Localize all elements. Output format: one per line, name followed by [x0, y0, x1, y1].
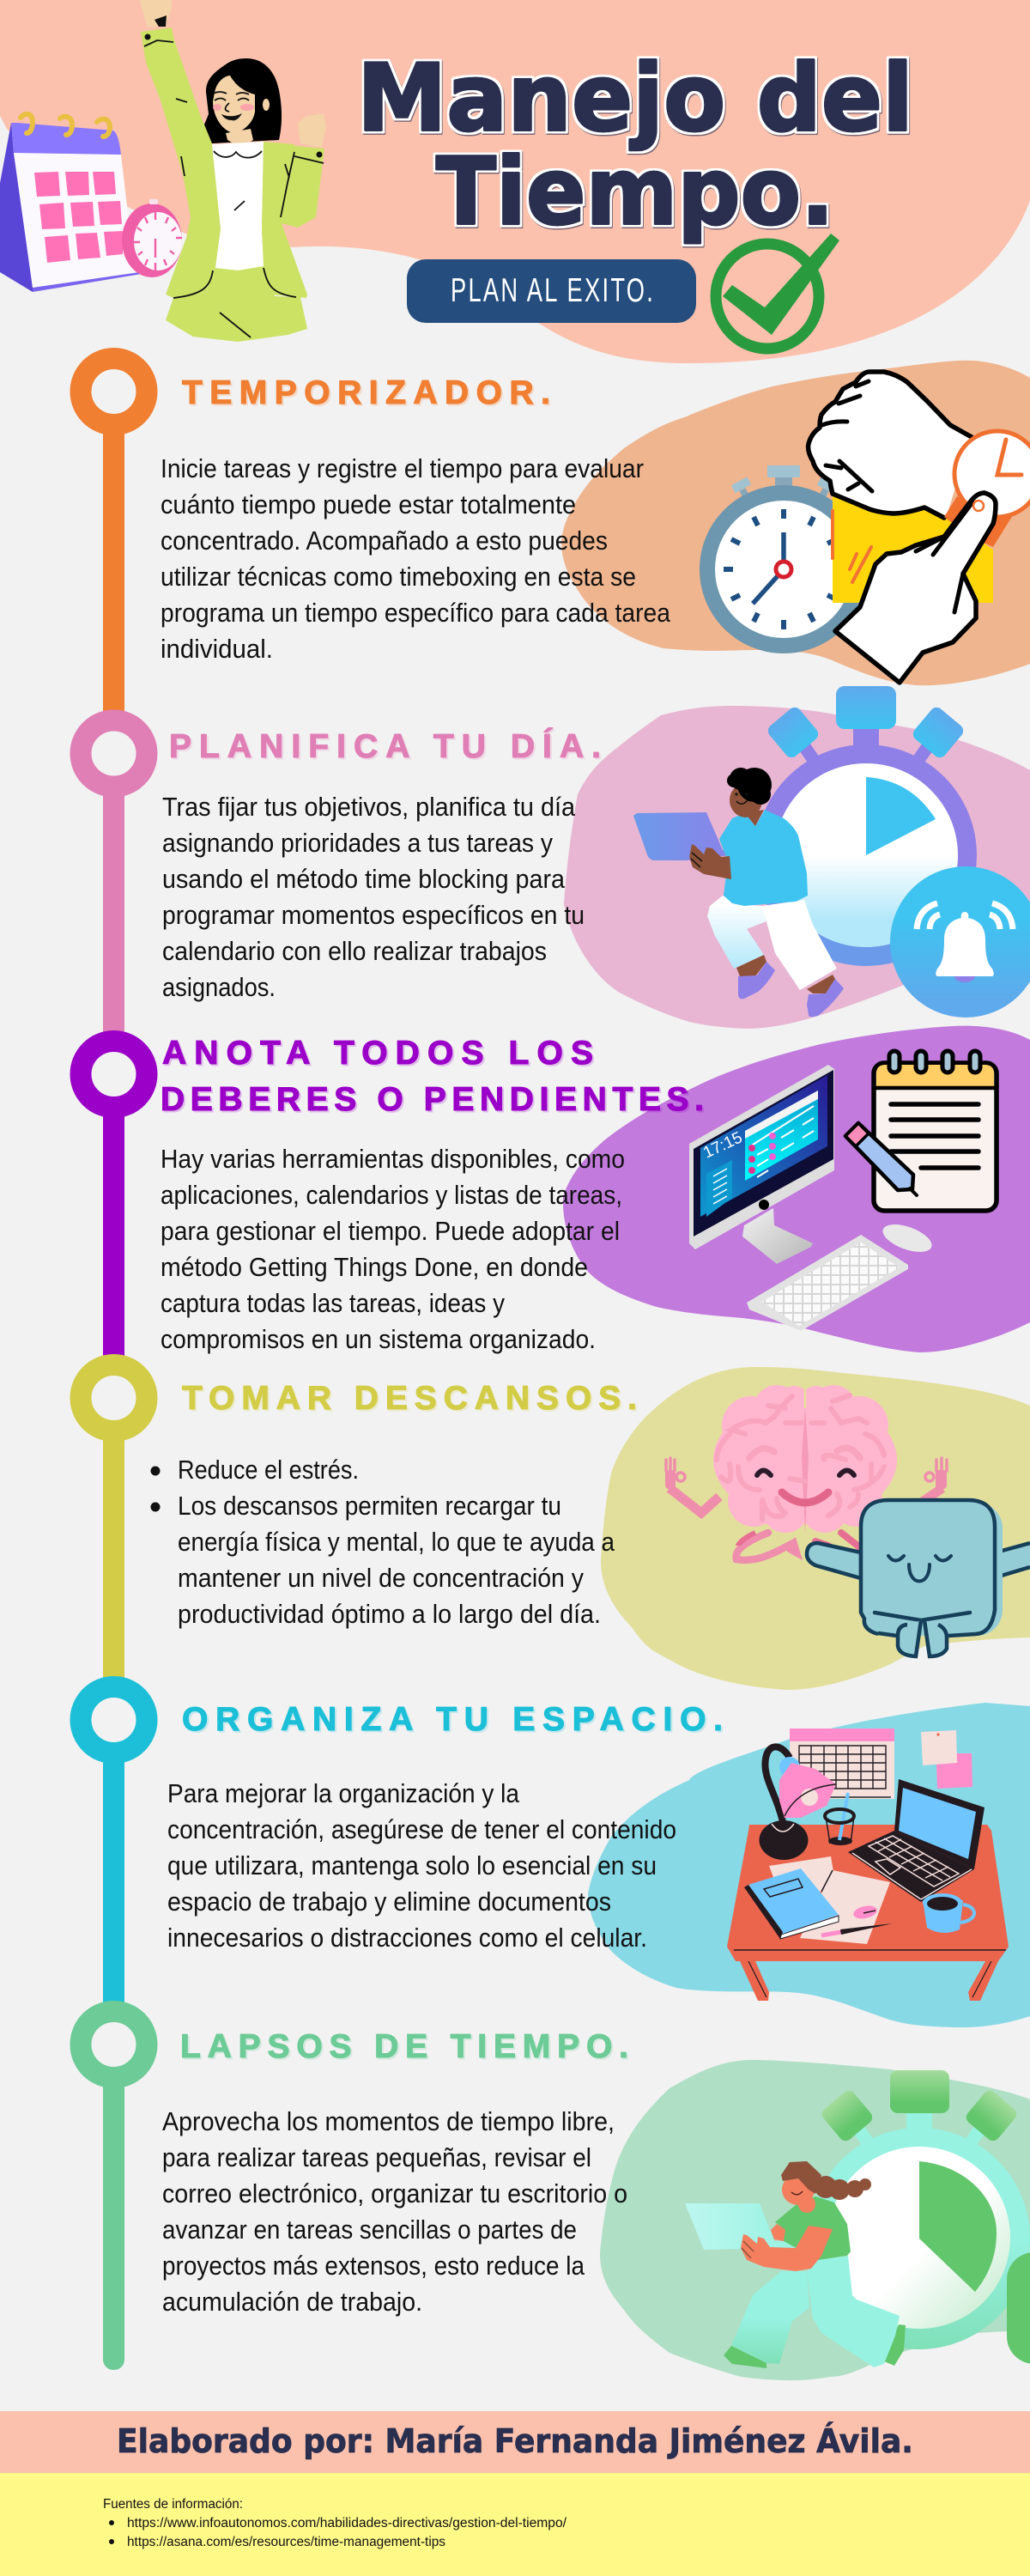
laptop	[894, 1779, 985, 1869]
stopwatch	[767, 465, 800, 477]
section 1 text: Inicie tareas y registre el tiempo para evaluar	[161, 453, 644, 483]
section 1 text: cuánto tiempo puede estar totalmente	[161, 489, 576, 519]
right arm	[282, 146, 324, 228]
head	[745, 810, 764, 826]
illustration: desk workspace	[727, 1728, 1009, 2001]
keyboard	[747, 1235, 908, 1331]
section 2 text: calendario con ello realizar trabajos	[162, 936, 547, 966]
section 1 text	[161, 453, 671, 664]
section 1 blob	[561, 361, 1030, 685]
section 4 bullet list: Reduce el estrés.	[178, 1455, 359, 1485]
section 6 text: correo electrónico, organizar tu escritorio o	[162, 2178, 627, 2208]
section 5 heading: ORGANIZA TU ESPACIO.	[182, 1701, 723, 1738]
illustration: meditating brain	[665, 1385, 947, 1560]
section 5 text	[167, 1778, 676, 1953]
right fist	[298, 113, 326, 148]
section 3 text	[161, 1144, 625, 1354]
desk legs	[740, 1961, 769, 2001]
section 5 text: espacio de trabajo y elimine documentos	[167, 1886, 611, 1917]
section 3 blob	[563, 1026, 1030, 1352]
section 1 text: programa un tiempo específico para cada tarea	[161, 598, 671, 628]
section 2 text: Tras fijar tus objetivos, planifica tu día	[162, 792, 576, 822]
section 2 text: asignados.	[162, 972, 276, 1002]
section 4 heading: TOMAR DESCANSOS.	[182, 1380, 637, 1417]
face	[213, 76, 255, 133]
section 5 text: Para mejorar la organización y la	[167, 1778, 520, 1808]
section 6 text: para realizar tareas pequeñas, revisar el	[162, 2142, 591, 2172]
pen	[821, 1932, 841, 1935]
section 6 heading: LAPSOS DE TIEMPO.	[180, 2028, 628, 2065]
brain face	[757, 1470, 854, 1475]
subtitle pill: PLAN AL EXITO.	[451, 272, 653, 309]
sticky notes	[936, 1753, 972, 1789]
monitor frame	[689, 1065, 834, 1249]
illustration: stopwatch and hands	[700, 372, 1030, 683]
section 6 text: acumulación de trabajo.	[162, 2287, 422, 2317]
section 1 text: utilizar técnicas como timeboxing en esta se	[161, 562, 636, 592]
torso	[771, 2224, 786, 2241]
stopwatch	[906, 2113, 932, 2132]
outfit details	[144, 40, 324, 337]
illustration: woman celebrating	[140, 0, 326, 342]
section 3 text: para gestionar el tiempo. Puede adoptar el	[161, 1216, 620, 1246]
illustration: desktop computer	[689, 1065, 936, 1331]
footer sources band	[0, 2473, 1030, 2576]
tablet	[685, 2203, 798, 2250]
section 5 text: concentración, asegúrese de tener el contenido	[167, 1814, 676, 1844]
pen cup	[828, 1837, 852, 1845]
section 3 heading	[161, 1035, 704, 1118]
hair	[204, 58, 282, 143]
notebook	[780, 1916, 839, 1939]
timeline rings	[81, 359, 147, 2078]
brain lobes	[713, 1385, 897, 1533]
section 3 heading: ANOTA TODOS LOS	[162, 1035, 593, 1072]
section 4 bullet list: Los descansos permiten recargar tu	[178, 1491, 561, 1521]
footer author band: Elaborado por: María Fernanda Jiménez Ávila.	[117, 2422, 913, 2460]
section 6 text: avanzar en tareas sencillas o partes de	[162, 2215, 577, 2245]
stopwatch	[853, 729, 879, 750]
head	[798, 2196, 815, 2213]
legs	[707, 896, 766, 969]
upper hand	[809, 372, 972, 518]
section 5 text: que utilizara, mantenga solo lo esencial en su	[167, 1850, 657, 1880]
desk top	[727, 1825, 1009, 1961]
section 3 text: Hay varias herramientas disponibles, como	[161, 1144, 625, 1174]
title	[357, 45, 913, 246]
section 4 bullet list	[151, 1455, 615, 1629]
front leg	[884, 2324, 906, 2366]
shirt	[212, 142, 264, 270]
raised arm and left jacket	[141, 27, 221, 298]
pointing hand	[835, 493, 996, 683]
illustration: stopwatch with person and bell	[633, 686, 1030, 1018]
raised fist	[140, 0, 172, 27]
section 2 heading: PLANIFICA TU DÍA.	[169, 727, 601, 765]
hand	[689, 844, 731, 879]
skirt	[166, 266, 307, 342]
footer sources band: https://asana.com/es/resources/time-management-tips	[127, 2535, 445, 2549]
right jacket	[262, 142, 307, 298]
bell badge	[890, 866, 1030, 1018]
illustration: desktop computer: 17:15	[700, 1128, 745, 1163]
papers	[769, 1856, 833, 1898]
section 1 heading: TEMPORIZADOR.	[182, 374, 550, 411]
watch face	[954, 431, 1030, 517]
section 4 blob	[601, 1367, 1030, 1690]
footer sources band: https://www.infoautonomos.com/habilidades-directivas/gestion-del-tiempo/	[127, 2516, 567, 2530]
section 4 bullet list: mantener un nivel de concentración y	[178, 1563, 584, 1593]
illustration: stopwatch with woman	[685, 2070, 1030, 2368]
wall calendar	[790, 1728, 894, 1799]
icon: calendar	[0, 114, 142, 292]
brain folds	[717, 1395, 884, 1520]
section 5 blob	[588, 1703, 1030, 2027]
eraser	[852, 1904, 878, 1921]
section 1 text: individual.	[161, 634, 273, 664]
section 2 text	[162, 792, 585, 1002]
illustration: blue meditating character	[807, 1500, 1030, 1656]
icon: pink clock	[122, 199, 182, 277]
watch strap	[944, 496, 1013, 547]
arm	[741, 2226, 833, 2271]
section 5 text: innecesarios o distracciones como el celular.	[167, 1923, 647, 1953]
section 2 blob	[564, 706, 1030, 1029]
section 2 text: programar momentos específicos en tu	[162, 900, 585, 930]
section 3 heading: DEBERES O PENDIENTES.	[161, 1081, 704, 1118]
section 4 bullet list: productividad óptimo a lo largo del día.	[178, 1599, 601, 1629]
illustration: notepad and pencil	[845, 1051, 997, 1211]
mouse	[879, 1219, 936, 1257]
section 3 text: aplicaciones, calendarios y listas de tareas,	[161, 1180, 622, 1210]
neck	[226, 129, 253, 148]
icon: green check	[716, 234, 839, 349]
lamp	[759, 1820, 809, 1860]
section 6 text: Aprovecha los momentos de tiempo libre,	[162, 2106, 615, 2136]
section 3 text: captura todas las tareas, ideas y	[161, 1288, 505, 1318]
section 3 text: compromisos en un sistema organizado.	[161, 1324, 596, 1354]
title: Manejo del	[357, 45, 913, 153]
section 6 blob	[600, 2060, 1030, 2380]
rear leg	[731, 2271, 809, 2364]
section 1 text: concentrado. Acompañado a esto puedes	[161, 526, 608, 556]
timeline bars	[103, 392, 124, 2370]
section 6 text: proyectos más extensos, esto reduce la	[162, 2251, 585, 2281]
footer author band	[0, 2411, 1030, 2473]
title: Tiempo.	[436, 139, 834, 246]
section 6 text	[162, 2106, 627, 2317]
mug	[960, 1905, 974, 1923]
torso	[719, 810, 808, 906]
subtitle pill	[407, 259, 696, 323]
section 2 text: usando el método time blocking para	[162, 864, 566, 894]
stand	[742, 1208, 813, 1264]
section 2 text: asignando prioridades a tus tareas y	[162, 828, 553, 858]
yellow sleeve	[833, 495, 993, 603]
section 3 text: método Getting Things Done, en donde	[161, 1252, 588, 1282]
header blob	[0, 0, 1030, 363]
green circle at edge	[1007, 2252, 1030, 2364]
section 4 bullet list: energía física y mental, lo que te ayuda a	[178, 1527, 615, 1557]
footer sources band: Fuentes de información:	[103, 2497, 243, 2512]
laptop	[633, 812, 742, 860]
arms and legs	[670, 1488, 942, 1513]
